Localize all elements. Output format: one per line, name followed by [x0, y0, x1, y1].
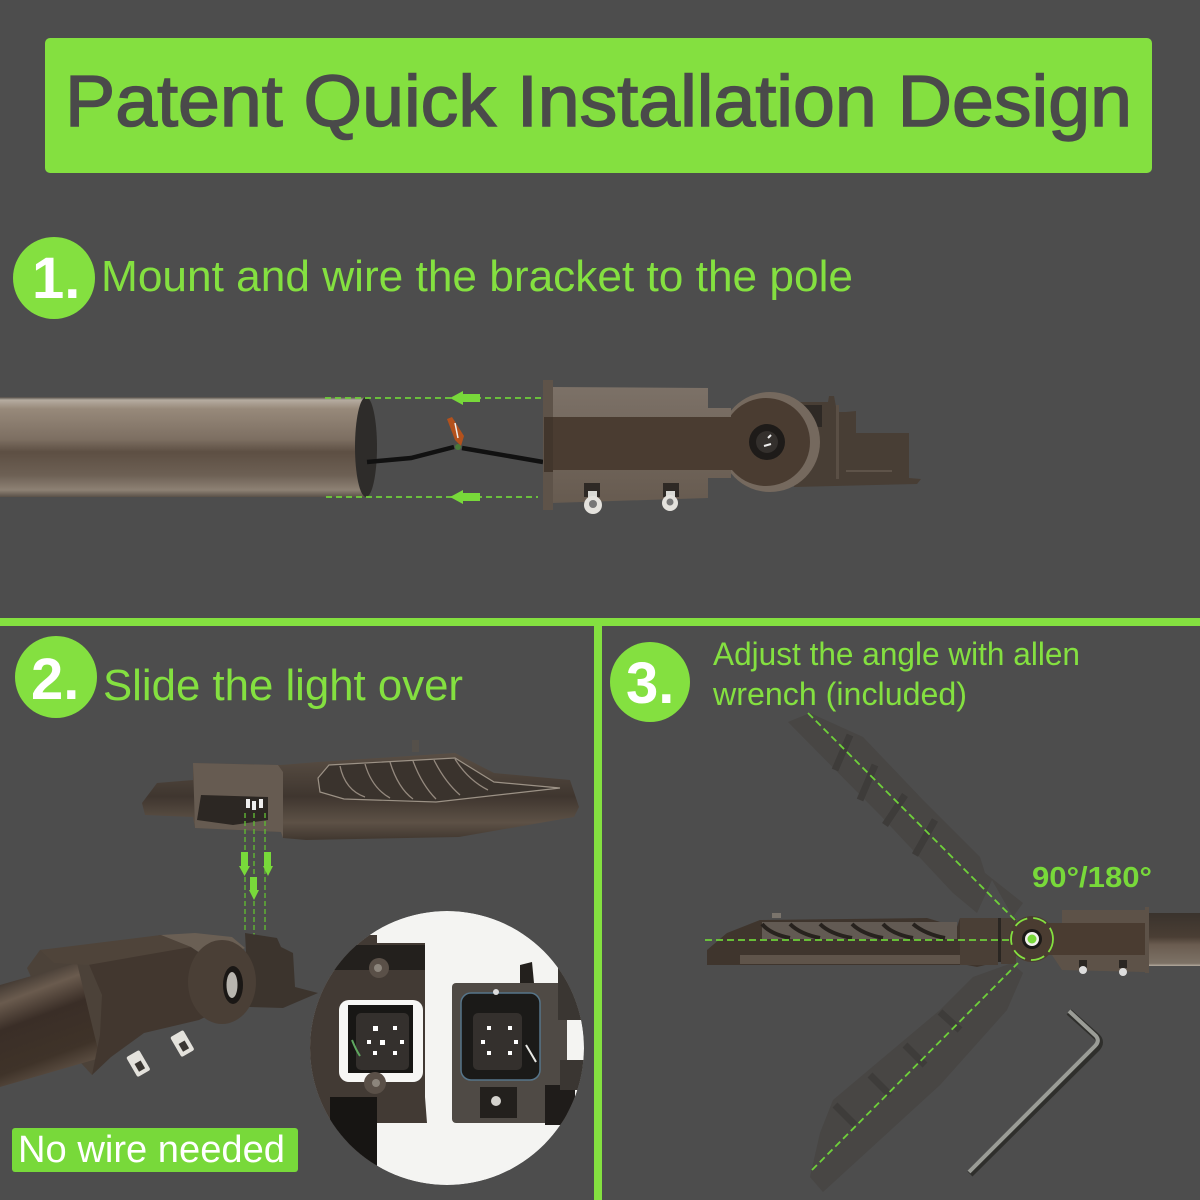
- step 3 instruction text: [712, 636, 1080, 712]
- title banner: [45, 38, 1152, 173]
- step 1 number badge: 1.: [32, 246, 80, 311]
- light fixture side view: [707, 913, 1016, 967]
- bracket: [543, 380, 921, 514]
- step 2 number badge: 2.: [31, 647, 79, 712]
- bracket on pole: [0, 933, 318, 1087]
- step 3 instruction text: wrench (included): [712, 676, 967, 712]
- pole and bracket side view: [1045, 907, 1200, 976]
- connector close-up inset: [300, 911, 590, 1190]
- step 2 heading: Slide the light over: [103, 661, 463, 710]
- step 2 number badge: [15, 636, 97, 718]
- panel: step 1 mount bracket: [0, 237, 921, 514]
- ghost light lower position: [810, 963, 1023, 1192]
- step 3 number badge: 3.: [626, 651, 674, 716]
- right connector module: [452, 960, 590, 1125]
- callout: no wire needed: No wire needed: [18, 1129, 285, 1171]
- allen wrench: [969, 1011, 1100, 1174]
- green dashed guide lines with arrows: [325, 391, 545, 504]
- step 3 instruction text: Adjust the angle with allen: [713, 636, 1080, 672]
- step 1 heading: Mount and wire the bracket to the pole: [101, 252, 853, 301]
- panel: step 2 slide light: [0, 636, 590, 1190]
- light fixture top view: [142, 740, 579, 840]
- green divider lines: [0, 618, 1200, 1200]
- wires: [367, 417, 543, 462]
- green alignment arrows: [239, 813, 273, 935]
- left connector module: [310, 935, 427, 1166]
- pole: [0, 397, 377, 497]
- panel: step 3 adjust angle: [610, 636, 1200, 1192]
- ghost light upper position: [788, 713, 1023, 917]
- step 3 number badge: [610, 642, 690, 722]
- step 1 number badge: [13, 237, 95, 319]
- pivot hub: [1009, 916, 1055, 962]
- green angle guide lines: [705, 713, 1018, 1170]
- angle label: 90°/180°: [1032, 862, 1152, 894]
- title text: Patent Quick Installation Design: [65, 62, 1132, 142]
